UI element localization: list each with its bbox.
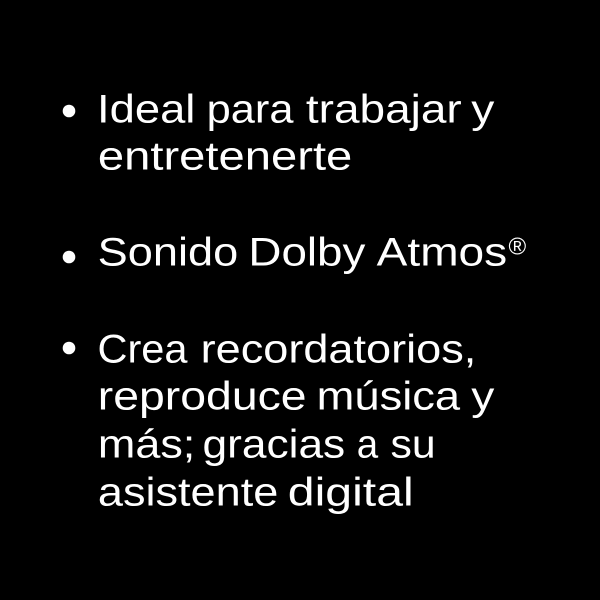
text: ideal para trabajar y entretenerte: para [207, 88, 294, 132]
text: sonido dolby atmos: Sonido [98, 231, 238, 275]
text: crea recordatorios: música [317, 375, 461, 419]
bullet dot [63, 342, 75, 354]
bullet dot [63, 251, 75, 263]
text: ideal para trabajar y entretenerte: trabajar [306, 88, 462, 132]
text: crea recordatorios: su [390, 423, 436, 467]
text: ideal para trabajar y entretenerte [97, 88, 494, 179]
text: crea recordatorios: digital [288, 471, 414, 515]
text: crea recordatorios: Crea [98, 328, 188, 372]
bullet item: sonido [63, 231, 526, 275]
bullet item: crea [63, 328, 494, 515]
text: crea recordatorios: reproduce [98, 375, 307, 419]
text: sonido dolby atmos: Atmos [377, 231, 507, 275]
text: sonido dolby atmos: Dolby [248, 231, 365, 275]
text: ideal para trabajar y entretenerte: Ideal [97, 88, 195, 132]
text: sonido dolby atmos [98, 231, 526, 275]
text: crea recordatorios: y [471, 375, 494, 419]
text: crea recordatorios: asistente [98, 471, 278, 515]
bullet item: ideal [63, 88, 494, 179]
text: crea recordatorios: a [357, 423, 379, 467]
bullet dot [63, 105, 75, 117]
text: crea recordatorios: gracias [202, 423, 345, 467]
text: ideal para trabajar y entretenerte: entretenerte [98, 135, 352, 179]
text: crea recordatorios [98, 328, 494, 515]
text: ideal para trabajar y entretenerte: y [471, 88, 494, 132]
text: crea recordatorios: recordatorios, [201, 328, 476, 372]
text: sonido dolby atmos: ® [508, 234, 526, 260]
text: crea recordatorios: más; [98, 423, 195, 467]
